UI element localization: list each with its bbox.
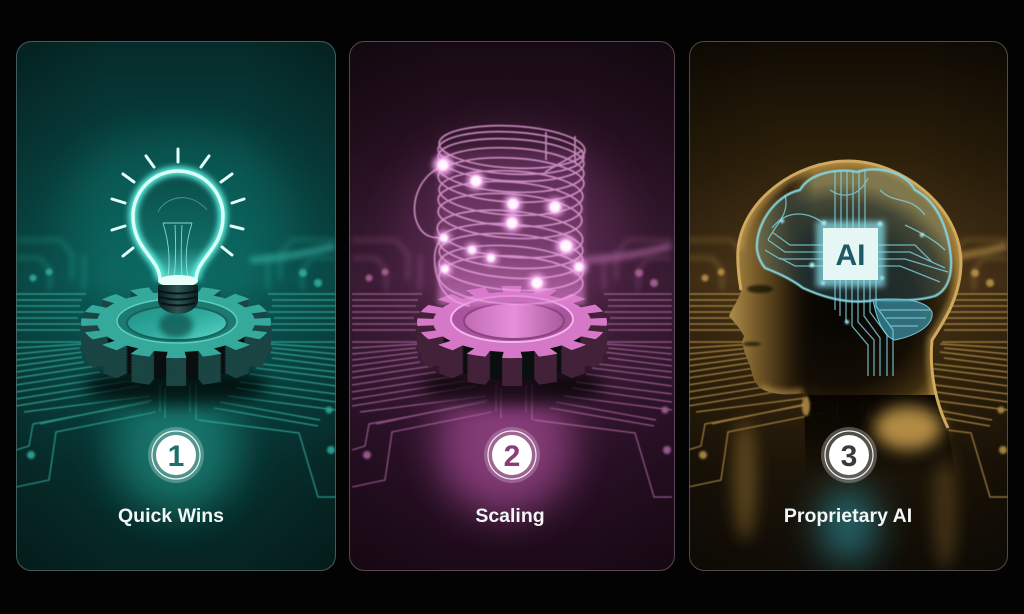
panel: Proprietary AI (688, 41, 1008, 571)
brain (757, 169, 951, 376)
gear hub (451, 296, 573, 342)
card border 2 (350, 42, 674, 570)
circuit floor (16, 240, 336, 497)
gear (420, 289, 604, 406)
icon: light bulb (112, 149, 244, 314)
panel: Scaling (349, 41, 675, 571)
gear hub (117, 299, 237, 343)
label: Quick Wins: Quick Wins (118, 505, 224, 527)
face highlight (729, 169, 813, 394)
AI chip: AI (836, 239, 866, 272)
floor glows (733, 420, 957, 570)
inner rim glow (740, 162, 960, 395)
badge 3: 3 (841, 440, 857, 473)
neck shadow (804, 395, 954, 469)
circuit floor (352, 240, 672, 497)
label: Proprietary AI: Proprietary AI (784, 505, 912, 527)
glowing nodes (433, 155, 587, 292)
AI chip (816, 221, 885, 287)
panel: Quick Wins (16, 41, 336, 571)
icon: spiral data cylinder (414, 122, 587, 308)
eye and mouth shadow (743, 285, 773, 346)
badge 2 (484, 427, 540, 483)
card border 3 (690, 42, 1008, 570)
icon: human head (725, 155, 965, 478)
icon: light rays (112, 149, 244, 256)
badge 1: 1 (168, 440, 184, 473)
head outline (738, 161, 961, 428)
neck light (874, 406, 942, 450)
badge 1 (148, 427, 204, 483)
gear (84, 289, 268, 406)
badge 2: 2 (504, 440, 520, 473)
badge 3 (821, 427, 877, 483)
circuit floor (688, 240, 1008, 497)
label: Scaling: Scaling (475, 505, 545, 527)
card border 1 (16, 42, 336, 570)
